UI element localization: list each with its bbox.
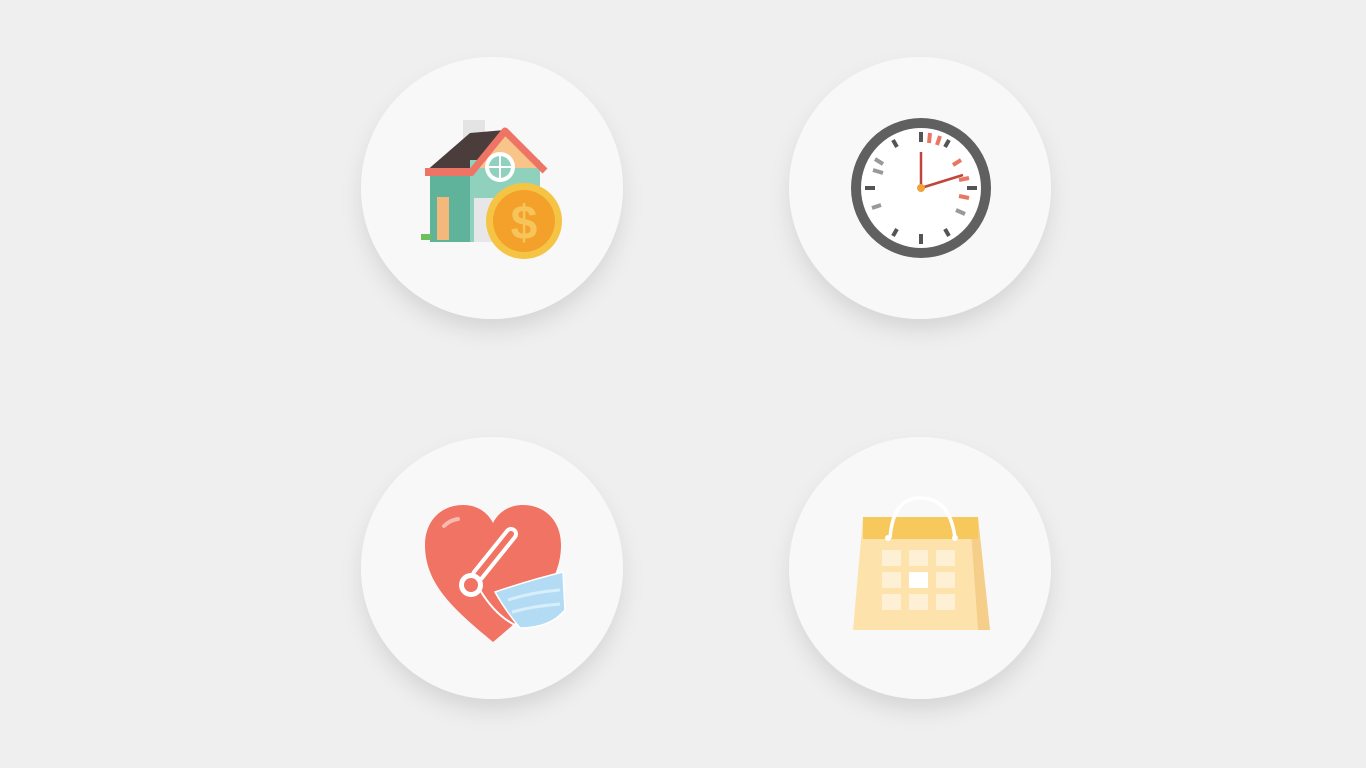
panel: health circle <box>361 437 623 699</box>
icon: clock <box>851 118 991 258</box>
icon: house with coin: $ <box>511 197 538 250</box>
panel: clock circle <box>789 57 1051 319</box>
icon: heart with thermometer and mask <box>425 505 565 642</box>
icon: house with coin <box>421 120 562 259</box>
icon: shopping bag calendar <box>853 498 990 630</box>
panel: house circle <box>361 57 623 319</box>
panel: shopping circle <box>789 437 1051 699</box>
